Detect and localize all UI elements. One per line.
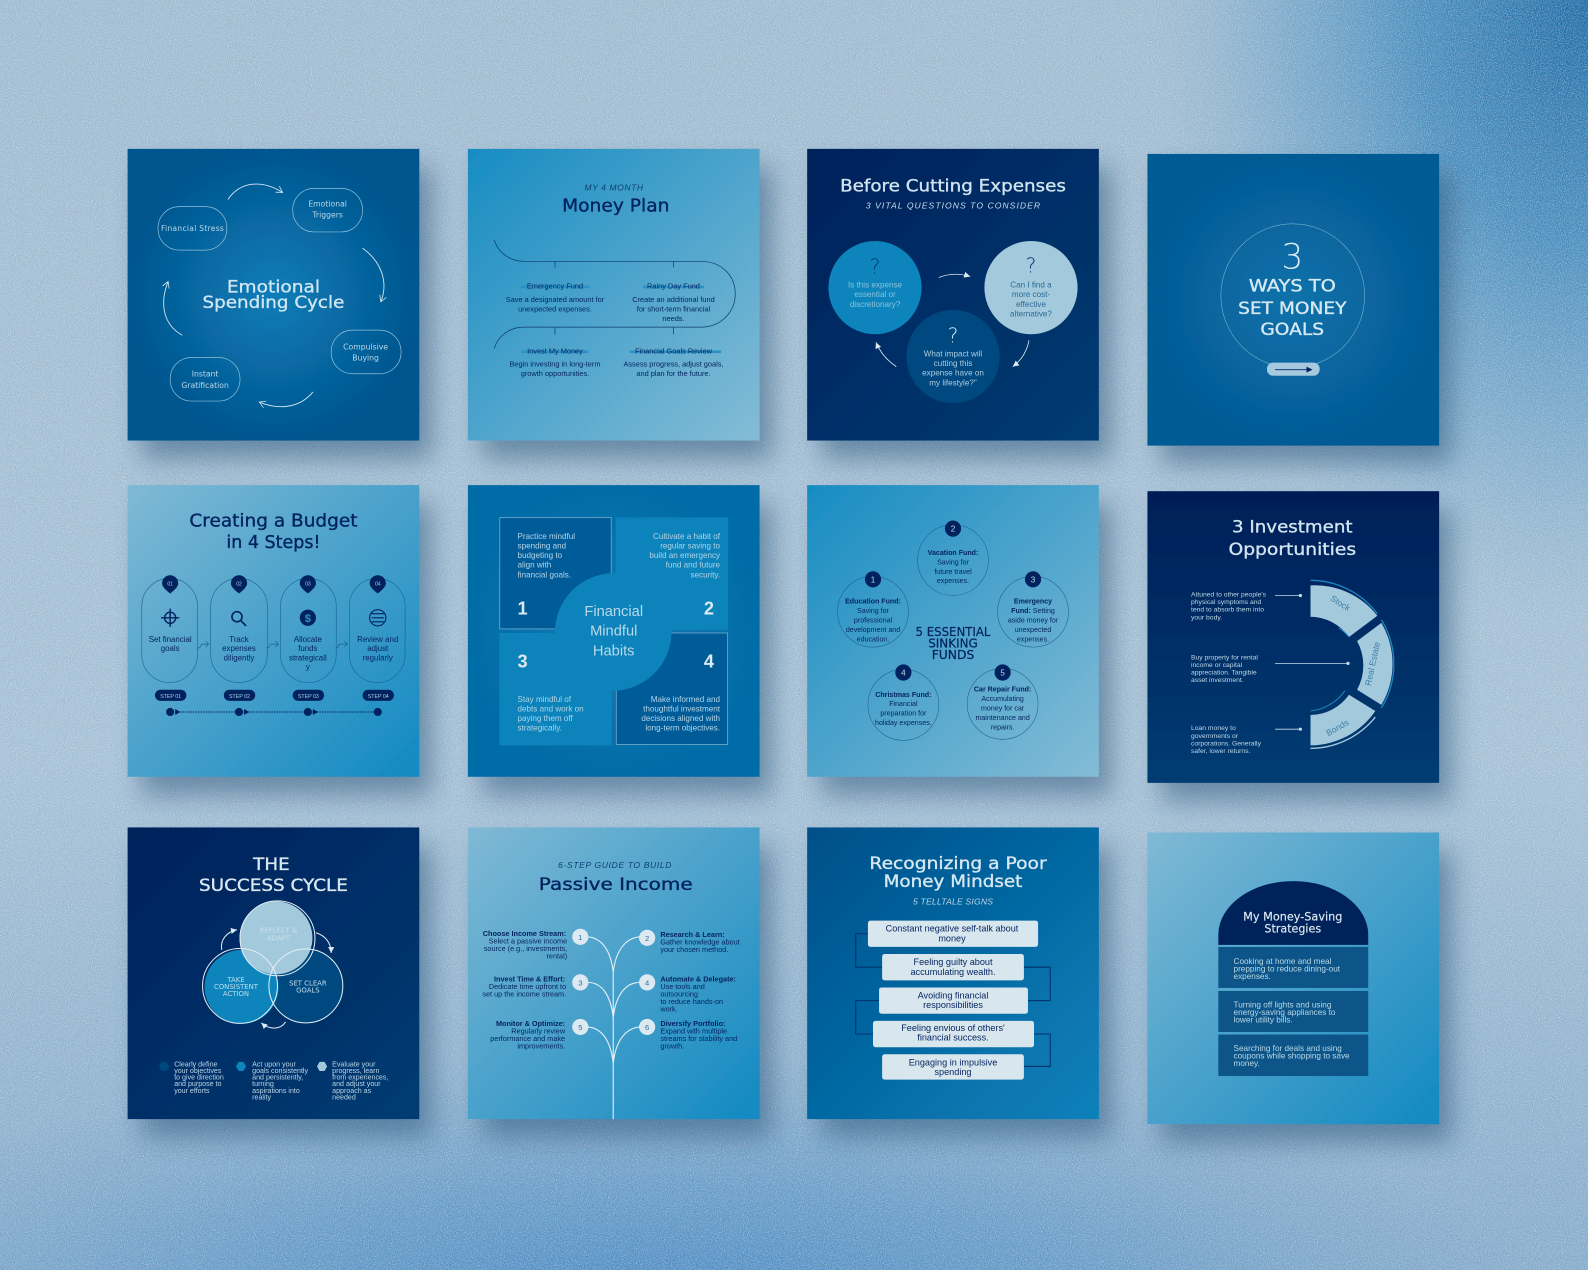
fund 1: Education: education. [857,635,889,643]
node: Financial Stress [158,207,227,250]
step: Emergency Fund: Emergency Fund [527,282,583,291]
heading: Money Plan: Money Plan [562,197,669,217]
fund 2: Vacation: future travel [934,568,972,576]
legend item 3: Evaluate your [332,1060,376,1068]
segment: Bonds [1311,691,1375,748]
legend item 3: progress, learn [332,1067,379,1075]
step nodes [572,929,655,1035]
step: Rainy Day Fund [632,282,715,323]
question circle 3: expense have on [922,369,984,378]
step nodes: 1 [578,933,582,942]
numbers: 2 [704,599,714,619]
step 3: $ [305,613,312,625]
quadrant 1 [500,518,611,629]
step nodes: 2 [645,934,649,943]
segment: Bonds: Bonds [1324,717,1350,738]
step 4 [349,575,405,683]
step 5 text: improvements. [517,1042,565,1051]
node: Instant Gratification: Instant [192,370,218,379]
card drop shadows [142,167,1451,1142]
fund 3: Emergency: aside money for [1008,616,1059,624]
step 1: goals [161,644,180,653]
step 4: adjust [367,644,389,653]
fund 2: Vacation: expenses. [937,577,969,585]
arrows [876,274,1029,367]
venn label: reflect: REFLECT & [260,927,298,935]
question circle 2: Can I find a [1010,281,1052,290]
node: Compulsive Buying: Buying [352,354,379,363]
numbers: 3 [518,651,528,671]
real estate description: appreciation. Tangible [1191,669,1257,676]
legend item 1 [159,1060,224,1095]
centre title: Financial [584,604,643,620]
legend item 2: reality [252,1093,272,1101]
strategy 2: energy-saving appliances to [1234,1008,1336,1017]
step: Financial Goals Review: Financial Goals Review [635,346,713,355]
step: Emergency Fund: Save a designated amount for [506,295,605,304]
node: Compulsive Buying: Compulsive [343,342,388,351]
sign 5 [882,1054,1024,1080]
connecting arrows [197,641,347,648]
subtitle: 3 VITAL QUESTIONS TO CONSIDER [866,201,1040,211]
legend item 2: Act upon your [252,1060,296,1068]
step: Financial Goals Review [623,346,723,378]
sign 4: financial success. [917,1033,989,1043]
step 6 text: Expand with multiple [660,1027,727,1036]
quadrant 4 [616,633,728,744]
question circle 3: cutting this [934,359,972,368]
fund 5: Car Repair [967,664,1038,739]
step labels: STEP 03 [298,694,319,700]
strategy 1: expenses. [1234,972,1271,981]
step: Invest My Money: growth opportunities. [521,369,589,378]
heading: Passive Income [539,875,693,895]
centre title: Habits [593,643,635,659]
strategy 2: Turning off lights and using [1234,1001,1332,1010]
step 4 text: work. [659,1005,678,1014]
step 2 text: Gather knowledge about [660,937,740,946]
step 1 text: Select a passive income [489,936,567,945]
fund 1: Education [838,571,908,647]
fund 3: Emergency: unexpected [1015,626,1051,634]
legend item 3: approach as [332,1087,372,1095]
step labels: STEP 02 [229,694,250,700]
step 3 text: Invest Time & Effort: [494,974,565,983]
bonds description: corporations. Generally [1191,740,1262,747]
step 3: y [306,662,310,671]
venn label: take action: CONSISTENT [214,983,259,991]
panel: My Money-Saving Strategies [1147,832,1439,1124]
step 2: expenses [222,644,256,653]
strategy 1: prepping to reduce dining-out [1234,965,1341,974]
sign 1 [868,921,1038,947]
heading: Creating a Budget [189,512,358,532]
step 1: 01 [167,581,173,587]
panel: Creating a Budget [128,485,419,777]
strategy 3: money. [1234,1059,1260,1068]
heading: WAYS TO [1249,276,1336,296]
panel: Emotional Spending Cycle [128,149,419,441]
fund 5: Car Repair: Car Repair Fund: [974,686,1031,694]
heading: Recognizing a Poor [869,854,1048,874]
stock description: physical symptoms and [1191,599,1262,606]
tree diagram [587,937,640,1119]
fund 3: Emergency: expenses. [1017,635,1049,643]
stock description: your body. [1191,614,1222,621]
step 1: Set financial [149,635,192,644]
strategy 1: Cooking at home and meal [1234,957,1332,966]
quadrant 3 [499,633,612,745]
node: Financial Stress: Financial Stress [161,224,224,233]
quadrant 2 [616,518,728,630]
fund 4: Christmas: Financial [889,700,918,708]
step nodes: 4 [645,978,649,987]
fund 4: Christmas [868,664,939,740]
step 4: 04 [375,581,381,587]
heading: in 4 Steps! [226,533,321,553]
strategy 1 [1218,947,1368,988]
fund 2: Vacation: 2 [951,525,956,534]
heading: Emotional Spending Cycle: Emotional [227,278,320,298]
fund 5: Car Repair: repairs. [991,723,1014,731]
panel: Before Cutting Expenses [807,149,1099,441]
question circle 3: my lifestyle?" [929,378,977,387]
fund 1: Education: Education Fund: [845,598,901,606]
step: Invest My Money: Invest My Money [527,346,583,355]
fund 2: Vacation [918,521,988,596]
text 2: build an emergency [649,551,721,560]
node: Emotional Triggers: Emotional [308,200,347,209]
step: Rainy Day Fund: Rainy Day Fund [647,282,700,291]
sign 4 [873,1021,1034,1047]
panel: 3 Investment Opportunities [1147,491,1439,783]
segment: Stock [1311,580,1377,637]
subtitle: 5 TELLTALE SIGNS [913,896,993,906]
step nodes: 6 [645,1023,649,1032]
sign 1: Constant negative self-talk about [886,924,1019,934]
venn diagram [203,901,343,1024]
cycle arrows [221,930,331,1028]
centre blob [555,573,671,691]
node: Compulsive Buying [331,330,401,374]
heading: 5 ESSENTIAL [916,625,991,639]
text 1: Practice mindful [518,532,575,541]
step 2: 02 [236,581,242,587]
sign 1: money [938,933,966,943]
panel: Passive Income [468,827,760,1119]
question circle 2: ? [1026,253,1036,277]
fund 5: Car Repair: 5 [1000,669,1005,678]
text 2: Cultivate a habit of [653,532,721,541]
question circle 1: ? [870,254,880,278]
dotted timeline [166,708,382,716]
stock description: Attuned to other people's [1191,592,1267,599]
heading: 3 Investment [1232,518,1353,538]
bonds description: Loan money to [1191,725,1236,732]
stock description: tend to absorb them into [1191,607,1264,614]
panel: 3 Ways to Set Money Goals [1147,154,1439,446]
question circle 2: alternative? [1010,309,1052,318]
step labels: STEP 04 [368,694,389,700]
legend item 1: your objectives [174,1067,222,1075]
heading: Before Cutting Expenses [840,176,1066,196]
text 1: align with [518,561,551,570]
step 1 text: Choose Income Stream: [483,929,566,938]
text 4: long-term objectives. [645,724,720,733]
panel: 5 Essential Sinking Funds [807,485,1099,777]
legend item 2: and persistently, [252,1074,303,1082]
fund 4: Christmas: holiday expenses. [875,719,932,727]
step 4 text: Automate & Delegate: [660,974,736,983]
step labels [155,690,394,701]
venn label: reflect: ADAPT [267,934,291,942]
step 4: Review and [357,635,398,644]
step: Emergency Fund [506,282,605,313]
step 2 [211,575,267,683]
text 4: thoughtful investment [643,704,721,713]
sign 3 [879,987,1028,1014]
node: Emotional Triggers: Triggers [311,211,343,220]
step 6 text: streams for stability and [660,1034,737,1043]
legend item 2: aspirations into [252,1087,300,1095]
sign 2: accumulating wealth. [910,967,996,977]
heading: Emotional Spending Cycle: Spending Cycle [203,293,344,313]
segment: Real Estate: Real Estate [1363,641,1382,687]
step: Invest My Money [509,346,600,378]
fund 5: Car Repair: money for car [981,705,1025,713]
step 5 text: Regularly review [511,1027,566,1036]
legend item 3: and adjust your [332,1080,381,1088]
fund 1: Education: Saving for [857,607,890,615]
step 6 text: Diversify Portfolio: [660,1019,725,1028]
step 6 text: growth. [660,1042,684,1051]
node: Instant Gratification [170,358,240,401]
fund 2: Vacation: Vacation Fund: [928,549,978,557]
step 3: 03 [305,581,311,587]
fund 3: Emergency: Fund: Setting [1011,607,1055,615]
panel: The Success Cycle [128,827,419,1119]
sign 2: Feeling guilty about [914,957,993,967]
fund 4: Christmas: Christmas Fund: [875,691,932,699]
venn label: set goals: SET CLEAR [289,979,327,987]
question circle 1 [828,241,922,334]
numbers: 4 [704,651,715,671]
fund 1: Education: development and [846,626,900,634]
question circle 1: discretionary? [850,300,901,309]
real estate description: income or capital [1191,662,1243,669]
legend item 1: to give direction [174,1074,224,1082]
heading: GOALS [1260,319,1324,339]
text 4: decisions aligned with [641,714,720,723]
fund 3: Emergency: Emergency [1014,598,1052,606]
fund 3: Emergency [998,571,1068,647]
question circle 2: effective [1016,300,1046,309]
panel: Recognizing a Poor Money Mindset [807,827,1099,1119]
heading: Opportunities [1228,540,1356,560]
numbers: 1 [518,599,528,619]
arrow button [1267,363,1320,376]
step 2: diligently [224,653,254,662]
question circle 3: ? [948,323,958,347]
timeline path [494,240,735,348]
fund 1: Education: 1 [871,575,876,584]
legend item 3: needed [332,1093,356,1101]
venn label: set goals: GOALS [296,987,320,995]
panel: Financial Mindful Habits [468,485,760,777]
step 3: funds [298,644,318,653]
question circle 3: What impact will [924,349,982,358]
venn label: take action: TAKE [226,976,245,984]
sign 5: spending [935,1067,971,1077]
badge ring [1221,224,1365,368]
step 3 [281,575,336,683]
heading: SINKING [928,636,978,650]
step: Financial Goals Review: Assess progress, adjust goals, [623,360,723,369]
step 4 text: Use tools and [660,982,705,991]
step 1 [142,575,197,683]
legend item 2: turning [252,1080,274,1088]
step: Rainy Day Fund: needs. [662,314,685,323]
question circle 1: Is this expense [848,281,903,290]
text 1: spending and [518,541,566,550]
segment: Real Estate [1357,620,1394,708]
pointer lines [1275,594,1349,730]
legend item 1: your efforts [174,1087,210,1095]
cycle arrows [164,184,384,407]
legend item 2 [236,1060,309,1101]
heading: THE [252,854,290,874]
sign 5: Engaging in impulsive [909,1057,997,1067]
heading: SET MONEY [1238,298,1347,318]
text 3: Stay mindful of [518,695,572,704]
real estate description: Buy property for rental [1191,654,1258,661]
step 4 text: outsourcing [660,990,698,999]
step 4 text: to reduce hands-on [660,997,723,1006]
heading: FUNDS [932,648,975,662]
strategy 3: Searching for deals and using [1234,1044,1342,1053]
fund 1: Education: professional [854,616,893,624]
real estate description: asset investment. [1191,677,1244,684]
bonds description: governments or [1191,733,1239,740]
legend item 3: from experiences, [332,1074,388,1082]
text 3: debts and work on [518,704,584,713]
strategy 2: lower utility bills. [1234,1015,1293,1024]
legend item 1: Clearly define [174,1060,218,1068]
arch header [1218,881,1368,945]
step 5 text: Monitor & Optimize: [496,1019,565,1028]
sign 3: Avoiding financial [918,991,988,1001]
step 2 text: Research & Learn: [660,930,725,939]
text 1: financial goals. [518,570,571,579]
fund 3: Emergency: 3 [1031,575,1036,584]
centre title: Mindful [590,624,637,640]
fund 4: Christmas: 4 [901,669,906,678]
arch header: Strategies [1264,923,1321,936]
step 1 text: source (e.g., investments, [484,944,567,953]
legend item 2: goals consistently [252,1067,309,1075]
step: Financial Goals Review: and plan for the future. [636,369,711,378]
arch header: My Money-Saving [1243,911,1342,924]
fund 5: Car Repair: maintenance and [975,714,1030,722]
venn label: take action: ACTION [223,990,249,998]
bonds description: safer, lower returns. [1191,748,1251,755]
text 2: fund and future [666,561,721,570]
node: Instant Gratification: Gratification [181,381,229,390]
step 2 text: your chosen method. [660,945,728,954]
step 1 text: rental) [547,952,567,961]
step: Invest My Money: Begin investing in long-term [509,360,600,369]
text 2: regular saving to [660,541,721,550]
strategy 3: coupons while shopping to save [1234,1052,1350,1061]
strategy 3 [1218,1035,1368,1076]
text 3: strategically. [518,724,562,733]
step 5 text: performance and make [490,1034,565,1043]
step nodes: 5 [578,1023,582,1032]
step: Rainy Day Fund: Create an additional fund [632,295,715,304]
step: Emergency Fund: unexpected expenses. [518,304,592,313]
step 3 text: set up the income stream. [482,990,566,999]
question circle 2 [984,241,1078,334]
step nodes: 3 [578,978,582,987]
sign 2 [882,954,1024,980]
text 2: security. [691,570,720,579]
question circle 3 [906,310,1000,403]
strategy 2 [1218,991,1368,1032]
question circle 1: essential or [854,290,896,299]
text 3: paying them off [518,714,573,723]
segment: Stock: Stock [1329,593,1353,613]
step 3 text: Dedicate time upfront to [489,982,566,991]
numeral 3: 3 [1281,237,1303,277]
legend item 3 [317,1060,388,1101]
fund 4: Christmas: preparation for [880,710,927,718]
panel: Money Plan [468,149,760,441]
step 2: Track [229,635,249,644]
step: Rainy Day Fund: for short-term financial [637,304,711,313]
fund 5: Car Repair: Accumulating [981,695,1024,703]
question circle 2: more cost- [1012,290,1050,299]
step 3: Allocate [294,635,322,644]
subtitle: MY 4 MONTH [584,182,644,192]
text 1: budgeting to [518,551,563,560]
step labels: STEP 01 [160,694,181,700]
sign 3: responsibilities [923,1000,983,1010]
sign 4: Feeling envious of others' [901,1023,1005,1033]
heading: SUCCESS CYCLE [199,875,348,895]
fund 2: Vacation: Saving for [937,558,970,566]
node: Emotional Triggers [293,188,363,232]
step 3: strategicall [289,653,327,662]
step 4: regularly [363,653,393,662]
subtitle: 6-STEP GUIDE TO BUILD [558,860,671,870]
legend item 1: and purpose to [174,1080,221,1088]
heading: Money Mindset [884,872,1023,892]
connectors [856,934,1050,1066]
text 4: Make informed and [651,695,720,704]
